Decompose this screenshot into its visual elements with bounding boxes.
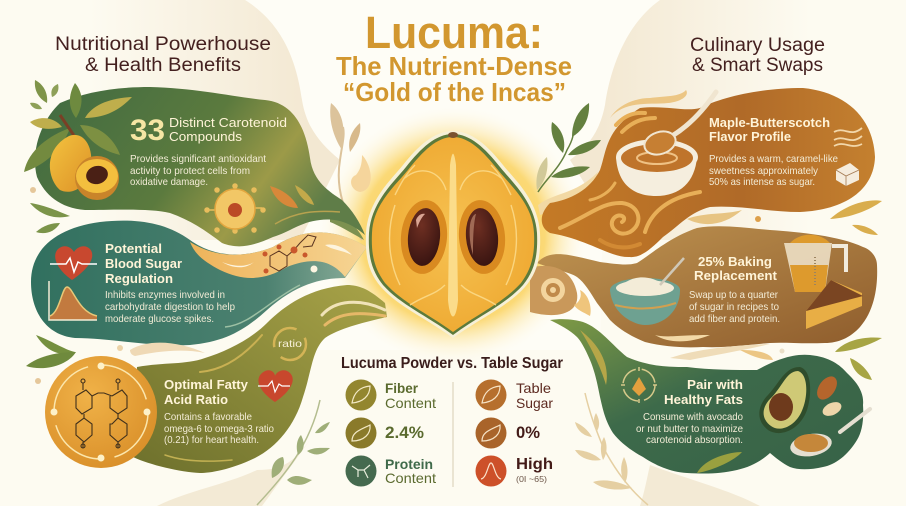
cream stream highlight xyxy=(222,245,352,267)
icon: ratio arrows xyxy=(274,328,306,360)
icon: powder bowl xyxy=(610,258,684,325)
heading text: Blood Sugar xyxy=(105,256,182,271)
white droplet xyxy=(310,266,318,272)
icon: seed xyxy=(346,418,376,448)
body text xyxy=(636,411,743,446)
lucuma values: Content xyxy=(385,470,436,486)
icon: leaf xyxy=(476,380,506,410)
icon: cake slice xyxy=(806,280,863,329)
title xyxy=(336,7,572,107)
soft beige swoosh: bottom right xyxy=(640,465,760,506)
right heading: Culinary Usage xyxy=(690,35,825,56)
heading text: Pair with xyxy=(687,377,743,392)
lucuma values: Protein xyxy=(385,456,433,472)
body text: Inhibits enzymes involved in xyxy=(105,289,225,301)
heading text: Potential xyxy=(105,241,162,256)
icon: almonds xyxy=(813,373,844,419)
fruit: halved lucuma xyxy=(366,131,540,338)
soft beige swoosh: top left xyxy=(90,0,340,240)
body text: add fiber and protein. xyxy=(689,313,780,325)
light bands xyxy=(165,302,385,461)
decorative leaves: right xyxy=(670,200,882,380)
swirl by fruit xyxy=(530,266,591,316)
orange stream xyxy=(190,232,367,278)
body text: Contains a favorable xyxy=(164,411,252,423)
panel: fatty acid ratio xyxy=(45,285,387,473)
lucuma values: Fiber xyxy=(385,380,419,396)
lucuma values: Content xyxy=(385,395,436,411)
icon: antioxidant cell xyxy=(205,184,265,233)
panel: healthy fats xyxy=(550,319,870,474)
divider xyxy=(452,382,454,487)
body text: Swap up to a quarter xyxy=(689,289,778,301)
leaf flourish xyxy=(580,330,607,385)
heading text xyxy=(664,377,743,407)
body text: sweetness approximately xyxy=(709,165,819,177)
panel: flavor profile xyxy=(542,88,875,257)
table sugar values: Table xyxy=(516,380,551,396)
stat number: 33 xyxy=(130,114,165,147)
flowing ribbons: right of fruit xyxy=(538,90,687,215)
autumn leaves xyxy=(270,185,340,224)
title: Lucuma: xyxy=(365,7,543,58)
icon: aroma waves xyxy=(834,128,862,146)
left heading: & Health Benefits xyxy=(85,55,241,76)
lucuma values: 2.4% xyxy=(385,423,424,442)
left heading xyxy=(55,34,271,76)
decorative sprig: centre right xyxy=(536,103,601,192)
decorative sprig: bottom right xyxy=(575,393,648,505)
heading text xyxy=(694,254,778,283)
heading text: Acid Ratio xyxy=(164,392,228,407)
title: “Gold of the Incas” xyxy=(343,77,566,107)
panel: blood sugar regulation xyxy=(31,221,367,345)
icon: seed xyxy=(476,418,506,448)
heading text xyxy=(164,377,249,407)
swirl xyxy=(560,113,700,247)
body text: or nut butter to maximize xyxy=(636,423,743,435)
icon: avocado xyxy=(759,367,810,433)
heading text xyxy=(169,115,287,144)
icon: sugar cube xyxy=(836,163,859,186)
icon: protein molecule xyxy=(346,456,376,486)
decorative sprig: bottom left xyxy=(257,400,330,505)
icon: bowl with spoon xyxy=(616,92,716,196)
right heading: & Smart Swaps xyxy=(692,55,823,76)
central column xyxy=(245,0,660,350)
left seed xyxy=(406,207,442,267)
leaves on branch xyxy=(24,80,132,172)
table sugar values: Sugar xyxy=(516,395,553,411)
table sugar values: 0% xyxy=(516,423,540,442)
icon: whole lucuma fruit xyxy=(50,135,91,192)
heading text: Healthy Fats xyxy=(664,392,743,407)
right heading xyxy=(690,35,825,76)
heading text: Optimal Fatty xyxy=(164,377,249,392)
heading text: Replacement xyxy=(694,268,778,283)
heading: Lucuma Powder vs. Table Sugar xyxy=(341,355,563,372)
body text: 50% as intense as sugar. xyxy=(709,176,815,188)
icon: molecule xyxy=(262,235,316,274)
icon: cut lucuma fruit xyxy=(75,156,119,200)
comparison: lucuma powder vs table sugar xyxy=(341,355,563,487)
soft beige swoosh: top right xyxy=(570,0,810,240)
flesh veins xyxy=(390,165,516,305)
icon: spoon of nut butter xyxy=(788,409,870,459)
panel: carotenoid compounds xyxy=(24,80,365,246)
icon: leaf xyxy=(346,380,376,410)
title: The Nutrient-Dense xyxy=(336,51,572,81)
body text xyxy=(130,153,266,188)
right seed xyxy=(464,207,500,267)
table sugar values: High xyxy=(516,456,553,473)
leaf in panel xyxy=(697,452,742,473)
seed cavities xyxy=(398,198,450,276)
body text: activity to protect cells from xyxy=(130,165,250,177)
soft beige swoosh: bottom left xyxy=(157,440,310,506)
body text: moderate glucose spikes. xyxy=(105,313,214,325)
icon: focus target xyxy=(621,367,657,403)
heading text: Compounds xyxy=(169,129,243,144)
body text: carbohydrate digestion to help xyxy=(105,301,235,313)
body text: Provides a warm, caramel-like xyxy=(709,153,838,165)
badge: omega molecule xyxy=(45,356,157,468)
body text xyxy=(164,411,274,446)
icon: heart with pulse xyxy=(258,370,293,402)
icon: heart with pulse xyxy=(50,246,97,280)
body text: oxidative damage. xyxy=(130,176,208,188)
light strokes in panel xyxy=(655,335,710,341)
decorative sprig: centre left xyxy=(330,103,371,240)
body text: omega-6 to omega-3 ratio xyxy=(164,423,274,435)
icon: glucose curve chart xyxy=(49,281,97,320)
decorative leaves: left lower xyxy=(26,187,205,384)
heading text: Regulation xyxy=(105,271,173,286)
heading text: Maple-Butterscotch xyxy=(709,115,830,130)
body text: (0.21) for heart health. xyxy=(164,434,259,446)
heading text: Distinct Carotenoid xyxy=(169,115,287,130)
body text: Consume with avocado xyxy=(643,411,743,423)
table sugar values xyxy=(516,380,553,484)
light stream in teal xyxy=(225,285,300,327)
heading text xyxy=(709,115,830,144)
central glow xyxy=(318,105,588,365)
stem xyxy=(448,132,458,138)
body text: Provides significant antioxidant xyxy=(130,153,266,165)
heading text: 25% Baking xyxy=(698,254,772,269)
panel: baking replacement xyxy=(537,226,877,347)
icon: glycemic curve xyxy=(476,456,506,486)
icon: ratio arrows: ratio xyxy=(278,338,302,350)
icon: measuring cup xyxy=(784,235,846,292)
heading text: Flavor Profile xyxy=(709,129,791,144)
lucuma values xyxy=(385,380,436,486)
body text xyxy=(709,153,838,188)
body text: carotenoid absorption. xyxy=(646,434,743,446)
table sugar values: (0I ~65) xyxy=(516,475,547,484)
body text xyxy=(105,289,235,325)
heading text xyxy=(105,241,182,286)
left heading: Nutritional Powerhouse xyxy=(55,34,271,55)
body text: of sugar in recipes to xyxy=(689,301,779,313)
body text xyxy=(689,289,780,325)
